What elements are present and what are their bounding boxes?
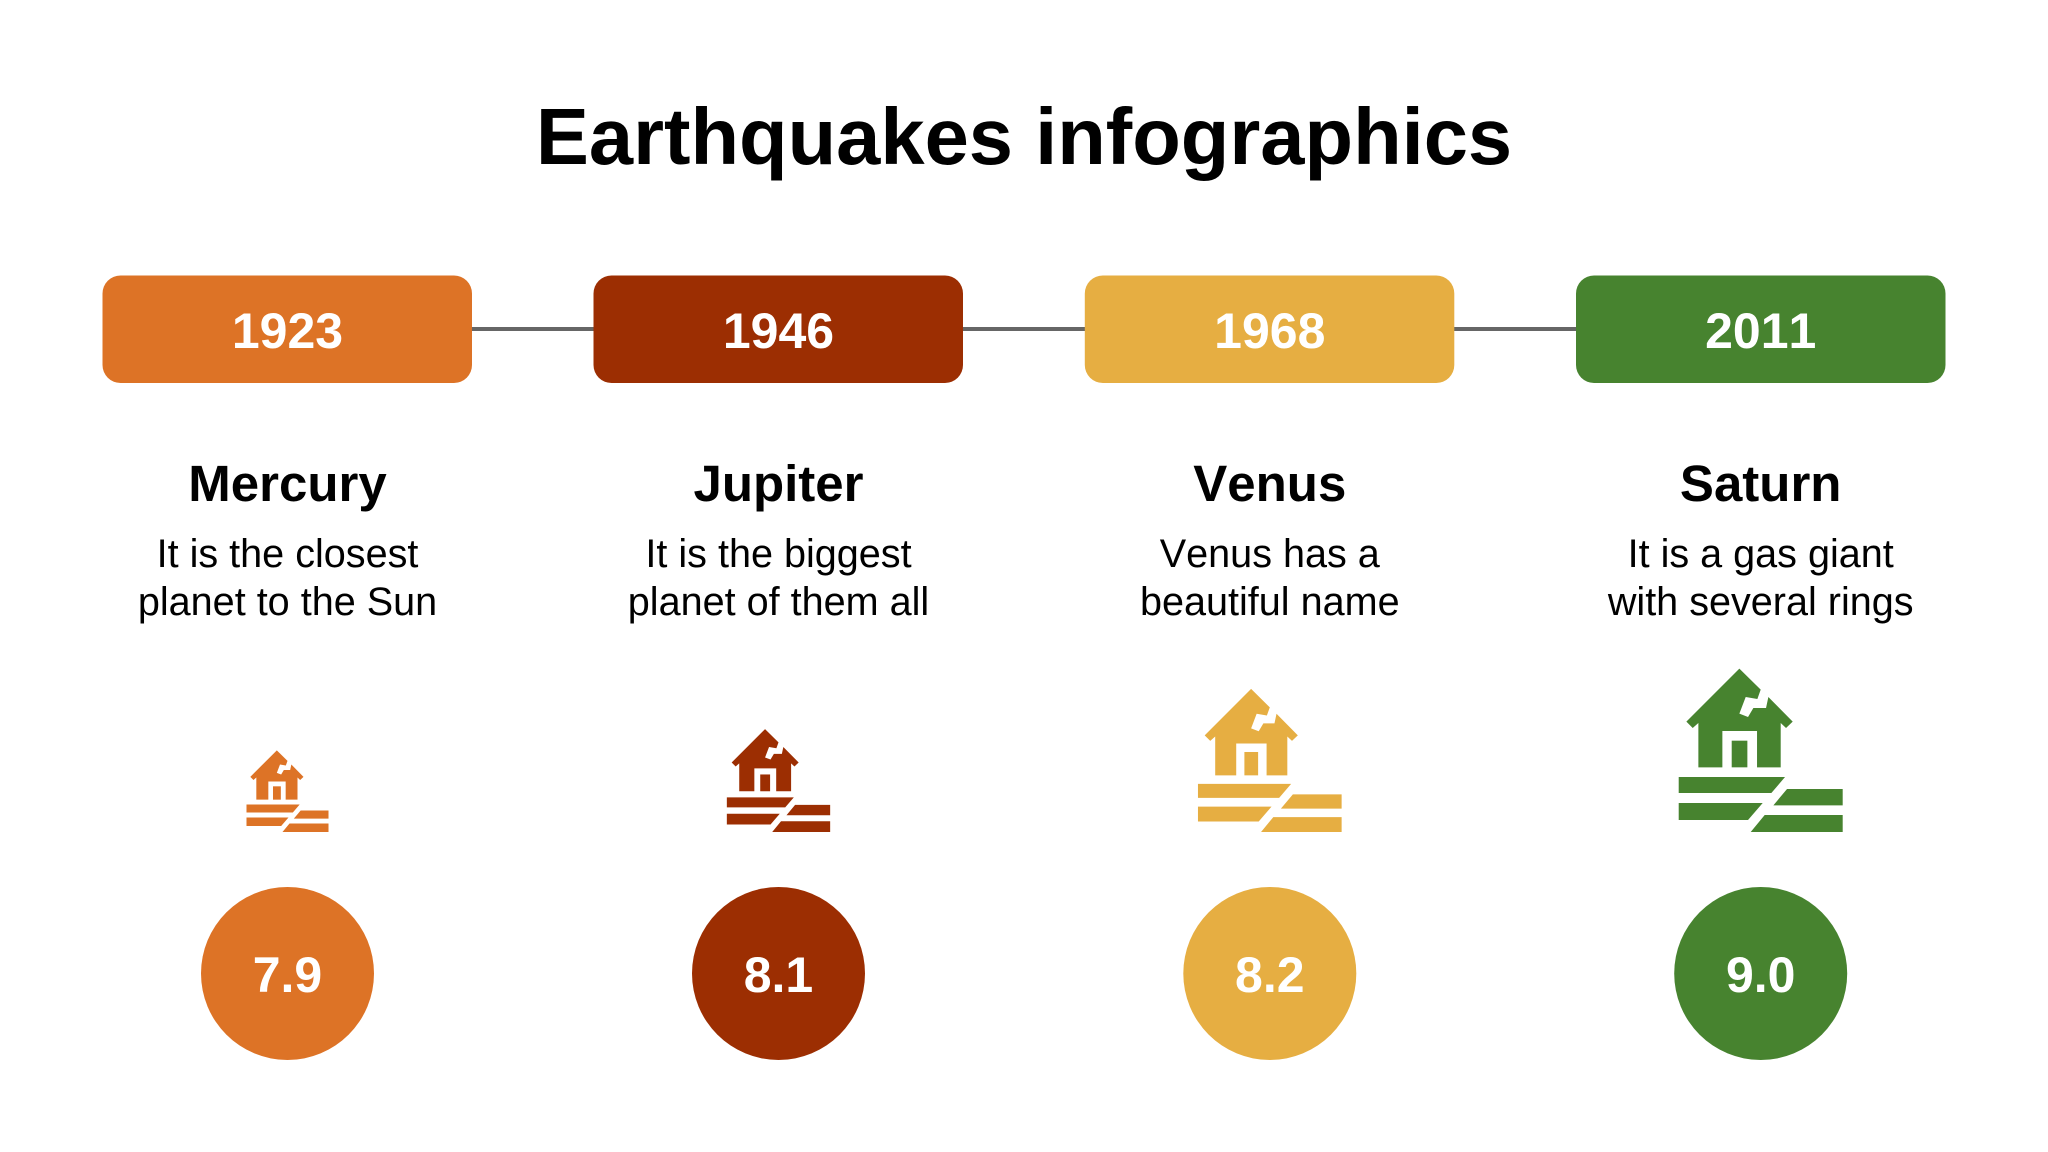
description: Jupiter: It is the biggest — [645, 532, 912, 576]
year badge: 1968: 1968 — [1214, 303, 1325, 359]
year badge: 2011 — [1576, 276, 1946, 383]
column: Jupiter 1946 — [594, 276, 963, 1060]
heading: Venus: Venus — [1193, 455, 1346, 512]
title: Earthquakes infographics — [536, 92, 1512, 181]
icon: damaged house on cracked ground, extra large — [1679, 669, 1843, 832]
year badge: 1946: 1946 — [723, 303, 834, 359]
year badge: 1923: 1923 — [232, 303, 343, 359]
magnitude circle: 8.2 — [1183, 887, 1356, 1060]
magnitude circle: 8.1 — [692, 887, 865, 1060]
magnitude circle: 9.0 — [1674, 887, 1847, 1060]
description: Jupiter: planet of them all — [628, 580, 929, 624]
magnitude circle: 7.9: 7.9 — [253, 947, 322, 1003]
description: Venus: Venus has a — [1160, 532, 1381, 576]
description: Venus: beautiful name — [1140, 580, 1400, 624]
magnitude circle: 8.2: 8.2 — [1235, 947, 1305, 1003]
column: Venus 1968 — [1085, 276, 1454, 1060]
magnitude circle: 8.1: 8.1 — [744, 947, 813, 1003]
magnitude circle: 7.9 — [201, 887, 374, 1060]
description: Saturn: with several rings — [1607, 580, 1914, 624]
icon: damaged house on cracked ground, small — [246, 750, 329, 832]
year badge: 1923 — [102, 276, 472, 383]
icon: damaged house on cracked ground, medium — [727, 729, 830, 832]
icon: damaged house on cracked ground, large — [1198, 689, 1342, 832]
timeline connector lines — [470, 327, 1579, 331]
description: Mercury: planet to the Sun — [138, 580, 437, 624]
description: Mercury: It is the closest — [157, 532, 418, 576]
year badge: 1946 — [594, 276, 963, 383]
year badge: 2011: 2011 — [1705, 303, 1816, 359]
column: Saturn 2011 — [1576, 276, 1946, 1060]
magnitude circle: 9.0: 9.0 — [1726, 947, 1795, 1003]
heading: Mercury: Mercury — [188, 455, 387, 512]
description: Saturn: It is a gas giant — [1628, 532, 1894, 576]
year badge: 1968 — [1085, 276, 1454, 383]
heading: Saturn: Saturn — [1680, 455, 1841, 512]
heading: Jupiter: Jupiter — [693, 455, 864, 512]
column: Mercury 1923 — [102, 276, 472, 1060]
